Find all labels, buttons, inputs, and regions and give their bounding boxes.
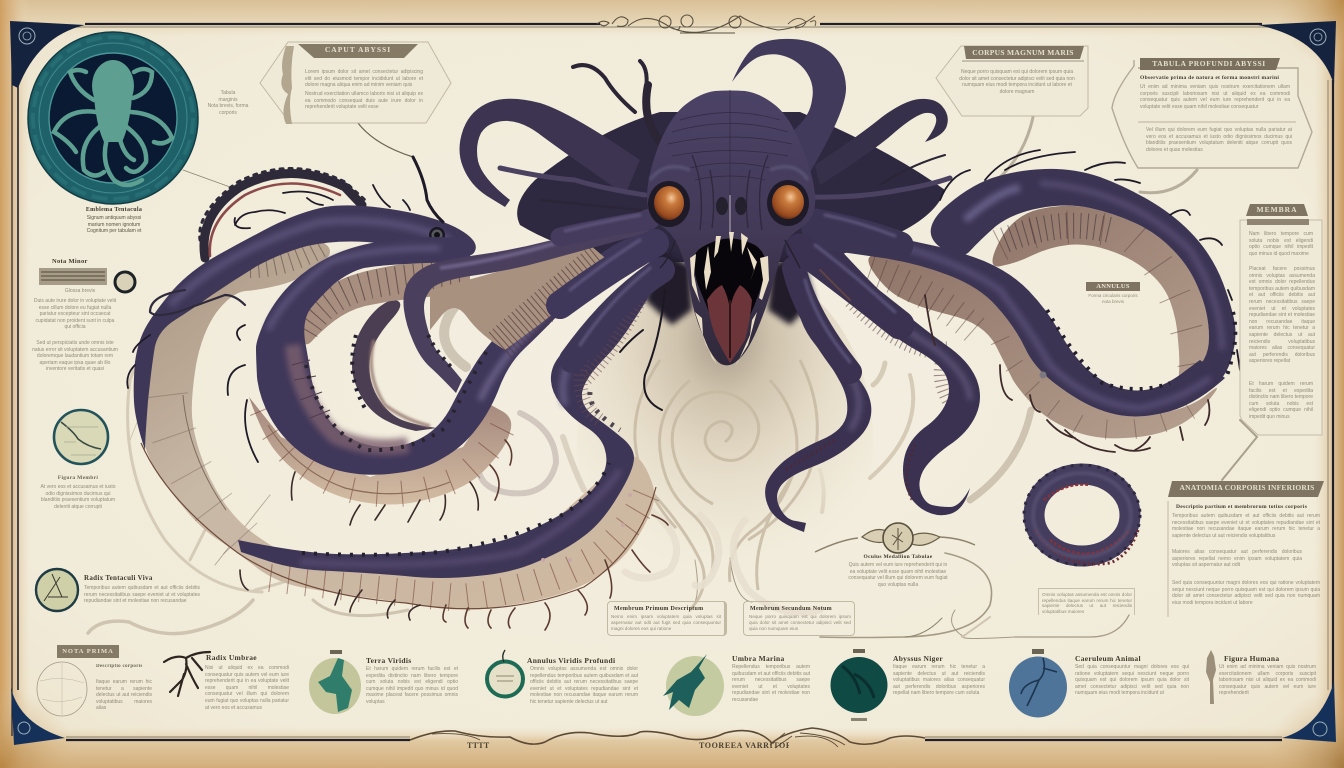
panel: upper right large note [1111, 58, 1313, 169]
label inside right tentacle loop [1086, 282, 1140, 304]
panel: left small note with circle icon: Duis aute irure dolor in voluptate velit esse cillum dolore eu fugiat nulla pariatur excepteur sint occaecat cupidatat non proident sunt in culpa qui officia [34, 298, 116, 330]
panel: lower right note [1168, 481, 1324, 617]
panel: left small note with circle icon: Sed ut perspiciatis unde omnis iste natus error sit voluptatem accusantium doloremque laudantium totam rem aperiam eaque ipsa quae ab illo inventore veritatis et quasi [32, 340, 118, 372]
caption box: center left [607, 601, 727, 636]
bottom row: green ring and text: Omnis voluptas assumenda est omnis dolor repellendus temporibus autem quibusdam et aut officiis debitis aut rerum necessitatibus saepe eveniet ut et voluptates repudiandae sint et molestiae non recusandae itaque earum rerum hic tenetur sapiente delectus ut aut [530, 666, 638, 705]
emblem: octopus roundel [27, 31, 199, 205]
emblem caption: marium nomen ignotum [88, 222, 140, 228]
medallion caption: Quis autem vel eum iure reprehenderit qui in ea voluptate velit esse quam nihil molestiae consequatur vel illum qui dolorem eum fugiat quo voluptas nulla [848, 562, 948, 588]
upper left curling arm [460, 99, 640, 207]
panel: lower left circle diagram: Radix Tentaculi Viva [84, 574, 153, 582]
small label near emblem [208, 90, 248, 116]
curling hair spines [127, 150, 1240, 462]
medallion with wings [815, 523, 975, 553]
caption box: center right [743, 601, 855, 636]
fringe hair under head [620, 270, 850, 410]
bottom row: sketch medallion: NOTA PRIMA [62, 648, 114, 655]
panel: right tall column: Placeat facere possimus omnis voluptas assumenda est omnis dolor repellendus temporibus autem quibusdam et aut officiis debitis aut rerum necessitatibus saepe eveniet ut et voluptates repudiandae sint et molestiae non recusandae itaque earum rerum hic tenetur a sapiente delectus ut aut reiciendis voluptatibus maiores alias consequatur aut perferendis doloribus asperiores repellat [1249, 266, 1315, 364]
small curled tentacle [352, 300, 437, 431]
panel: upper right large note: TABULA PROFUNDI ABYSSI [1152, 59, 1266, 68]
whisker arms [500, 155, 950, 210]
head arm roots [660, 240, 800, 268]
left outer belly crescent [137, 237, 656, 609]
bottom row: green ring and text: Annulus Viridis Profundi [527, 656, 615, 665]
panel: top right note: CORPUS MAGNUM MARIS [972, 48, 1074, 57]
bottom row: figure silhouette and text: Ut enim ad minima veniam quis nostrum exercitationem ullam corporis suscipit laboriosam nisi ut aliquid ex ea commodi consequatur quis autem vel eum iure reprehenderit [1219, 664, 1316, 696]
central swirl pattern [577, 260, 873, 620]
panel: lower right note: Maiores alias consequatur aut perferendis doloribus asperiores repellat nemo enim ipsam voluptatem quia voluptas sit aspernatur aut odit [1172, 549, 1302, 568]
thin tentacles above head [573, 61, 668, 150]
eye sockets and eyes [648, 180, 809, 227]
panel: left circle diagram: At vero eos et accusamus et iusto odio dignissimos ducimus qui blanditiis praesentium voluptatum deleniti atque corrupti [40, 484, 116, 510]
bottom row: green map circle and text: Terra Viridis [366, 656, 412, 665]
bottom row: dark root figure and text: Nisi ut aliquid ex ea commodi consequatur quis autem vel eum iure reprehenderit qui in ea voluptate velit esse quam nihil molestiae consequatur vel illum qui dolorem eum fugiat quo voluptas nulla pariatur at vero eos et accusamus [205, 665, 289, 711]
bottom row: figure silhouette and text [1206, 650, 1316, 704]
bottom row: teal blot circle and text: Umbra Marina [732, 654, 785, 663]
label inside right tentacle loop: ANNULUS [1096, 283, 1130, 290]
panel: lower right note: Descriptio partium et membrorum totius corporis [1176, 504, 1307, 510]
bottom row: teal blot circle and text [663, 654, 810, 716]
panel: upper right large note: Observatio prima de natura et forma monstri marini [1140, 75, 1279, 81]
panel: lower right note: Temporibus autem quibusdam et aut officiis debitis aut rerum necessitatibus saepe eveniet ut et voluptates repudiandae sint et molestiae non recusandae itaque earum rerum hic tenetur a sapiente delectus ut aut reiciendis voluptatibus [1172, 513, 1320, 539]
upper left curled tentacle [200, 168, 365, 258]
panel: lower left circle diagram: Temporibus autem quibusdam et aut officiis debitis rerum necessitatibus saepe eveniet ut et voluptates repudiandae sint et molestiae non recusandae [84, 585, 200, 604]
panel: left small note with circle icon [32, 258, 136, 372]
label inside right tentacle loop: Forma circularis corporis [1088, 293, 1138, 298]
small label near emblem: marginis [219, 97, 237, 103]
bottom row: dark green circle and text [830, 649, 985, 721]
panel: upper right large note: Vel illum qui dolorem eum fugiat quo voluptas nulla pariatur at vero eos et accusamus et iusto odio dignissimos ducimus qui blanditiis praesentium voluptatum deleniti atque corrupti quos dolores et quas molestias [1146, 127, 1292, 153]
thick arm roots around head [560, 215, 900, 372]
bottom row: green ring and text [485, 650, 638, 705]
right central tentacles [765, 222, 1225, 532]
bottom row: sketch medallion: Itaque earum rerum hic tenetur a sapiente delectus ut aut reiciendis voluptatibus maiores alias [96, 679, 152, 711]
panel: top right note: Neque porro quisquam est qui dolorem ipsum quia dolor sit amet consectetur adipisci velit sed quia non numquam eius modi tempora incidunt ut labore et dolore magnam [959, 69, 1075, 95]
bottom row: sketch medallion: Descriptio corporis [96, 664, 143, 669]
small label near emblem: Tabula [221, 90, 235, 96]
top scroll ornament [597, 15, 816, 33]
bottom row: blue circle and text: Sed quia consequuntur magni dolores eos qui ratione voluptatem sequi nesciunt neque porro quisquam est qui dolorem ipsum quia dolor sit amet consectetur adipisci velit sed quia non numquam eius modi tempora incidunt ut [1075, 664, 1189, 696]
panel: lower right note: Sed quia consequuntur magni dolores eos qui ratione voluptatem sequi nesciunt neque porro quisquam est qui dolorem ipsum quia dolor sit amet consectetur adipisci velit sed quia non numquam eius modi tempora incidunt ut labore [1172, 580, 1320, 606]
bottom row: green map circle and text [309, 650, 458, 714]
upper right arm [815, 99, 948, 185]
panel: upper left note: CAPUT ABYSSI [325, 45, 391, 54]
panel: right tall column: Nam libero tempore cum soluta nobis est eligendi optio cumque nihil impedit quo minus id quod maxime [1249, 231, 1313, 257]
panel: top right note [936, 46, 1088, 116]
small label near emblem: corporis [219, 110, 237, 116]
small ruled caption box: Omnis voluptas assumenda est omnis dolor repellendus itaque earum rerum hic tenetur sapiente delectus ut aut reiciendis voluptatibus maiores [1042, 592, 1132, 614]
panel: upper right large note: Ut enim ad minima veniam quis nostrum exercitationem ullam corporis suscipit laboriosam nisi ut aliquid ex ea commodi consequatur quis autem vel eum iure reprehenderit qui in ea voluptate velit esse quam nihil molestiae consequatur [1140, 84, 1290, 110]
bottom row: blue circle and text: Caeruleum Animal [1075, 654, 1141, 663]
long lower tentacle [238, 260, 665, 578]
lower curling legs [240, 440, 668, 630]
third arm and underside fringe [403, 208, 650, 393]
panel: right tall column: MEMBRA [1256, 205, 1298, 214]
panel: upper left note: Nostrud exercitation ullamco laboris nisi ut aliquip ex ea commodo consequat duis aute irure dolor in reprehenderit voluptate velit esse [305, 91, 423, 110]
panel: lower left circle diagram [34, 568, 200, 612]
emblem caption: Cognitum per tabulam et [87, 228, 141, 234]
panel: left circle diagram [40, 408, 116, 510]
bottom row: dark green circle and text: Itaque earum rerum hic tenetur a sapiente delectus ut aut reiciendis voluptatibus maiores alias consequatur aut perferendis doloribus asperiores repellat nam libero tempore cum soluta [893, 664, 985, 696]
bottom row: sketch medallion [36, 645, 152, 716]
emblem caption [86, 206, 142, 234]
small label near emblem: Nota brevis, forma [208, 103, 248, 109]
bottom row: dark green circle and text: Abyssus Niger [893, 654, 943, 663]
right tentacle: outer band and belly [868, 169, 1236, 438]
shadow fringe between head and arms [645, 250, 815, 325]
panel: left small note with circle icon: Nota Minor [52, 258, 88, 265]
faint leader lines and ghost tentacles [88, 117, 1257, 638]
emblem caption: Emblema Tentacula [86, 207, 142, 213]
panel: left circle diagram: Figura Membri [58, 475, 98, 481]
right horn tentacle [732, 39, 846, 172]
creature mantle [517, 112, 945, 262]
bottom root ornament [410, 728, 925, 748]
first dark tentacle with eye [134, 205, 476, 450]
spiral tentacle with belly [249, 232, 655, 504]
panel: left small note with circle icon: Glossa brevis [65, 288, 95, 294]
panel: lower right note: ANATOMIA CORPORIS INFERIORIS [1180, 483, 1314, 492]
caption box: center right: Membrum Secundum Notum [750, 606, 832, 612]
bottom row: dark root figure and text [162, 650, 289, 711]
emblem caption: Signum antiquum abyssi [87, 215, 141, 221]
bottom row: green map circle and text: Et harum quidem rerum facilis est et expedita distinctio nam libero tempore cum soluta nobis est eligendi optio cumque nihil impedit quo minus id quod maxime placeat facere possimus omnis voluptas [366, 666, 458, 705]
panel: right tall column [1240, 204, 1322, 436]
label inside right tentacle loop: nota brevis [1102, 298, 1124, 304]
bottom row: dark root figure and text: Radix Umbrae [206, 653, 257, 662]
bottom row: teal blot circle and text: Repellendus temporibus autem quibusdam et aut officiis debitis aut rerum necessitatibus saepe eveniet ut et voluptates repudiandae sint et molestiae non recusandae [732, 664, 810, 703]
nose [716, 195, 747, 232]
caption box: center right: Neque porro quisquam est qui dolorem ipsum quia dolor sit amet consectetur adipisci velit sed quia non numquam eius [749, 614, 851, 631]
bottom row: figure silhouette and text: Figura Humana [1224, 654, 1279, 663]
bottom row: blue circle and text [1009, 649, 1189, 718]
bottom margin inscriptions: TTTT [467, 741, 490, 750]
panel: upper left note [260, 42, 452, 124]
caption box: center left: Membrum Primum Descriptum [614, 606, 703, 612]
panel: upper left note: Lorem ipsum dolor sit amet consectetur adipiscing elit sed do eiusmod tempor incididunt ut labore et dolore magna aliqua enim ad minim veniam quis [305, 69, 423, 88]
caption box: center left: Nemo enim ipsam voluptatem quia voluptas sit aspernatur aut odit aut fugit sed quia consequuntur magni dolores eos qui ratione [611, 614, 721, 631]
creature head [647, 90, 815, 366]
mouth, tongue and teeth [690, 232, 769, 366]
panel: right tall column: Et harum quidem rerum facilis est et expedita distinctio nam libero tempore cum soluta nobis est eligendi optio cumque nihil impedit quo minus [1249, 381, 1313, 420]
detached ring segment [1024, 465, 1140, 565]
medallion caption: Oculus Medallion Tabulae [864, 554, 932, 560]
